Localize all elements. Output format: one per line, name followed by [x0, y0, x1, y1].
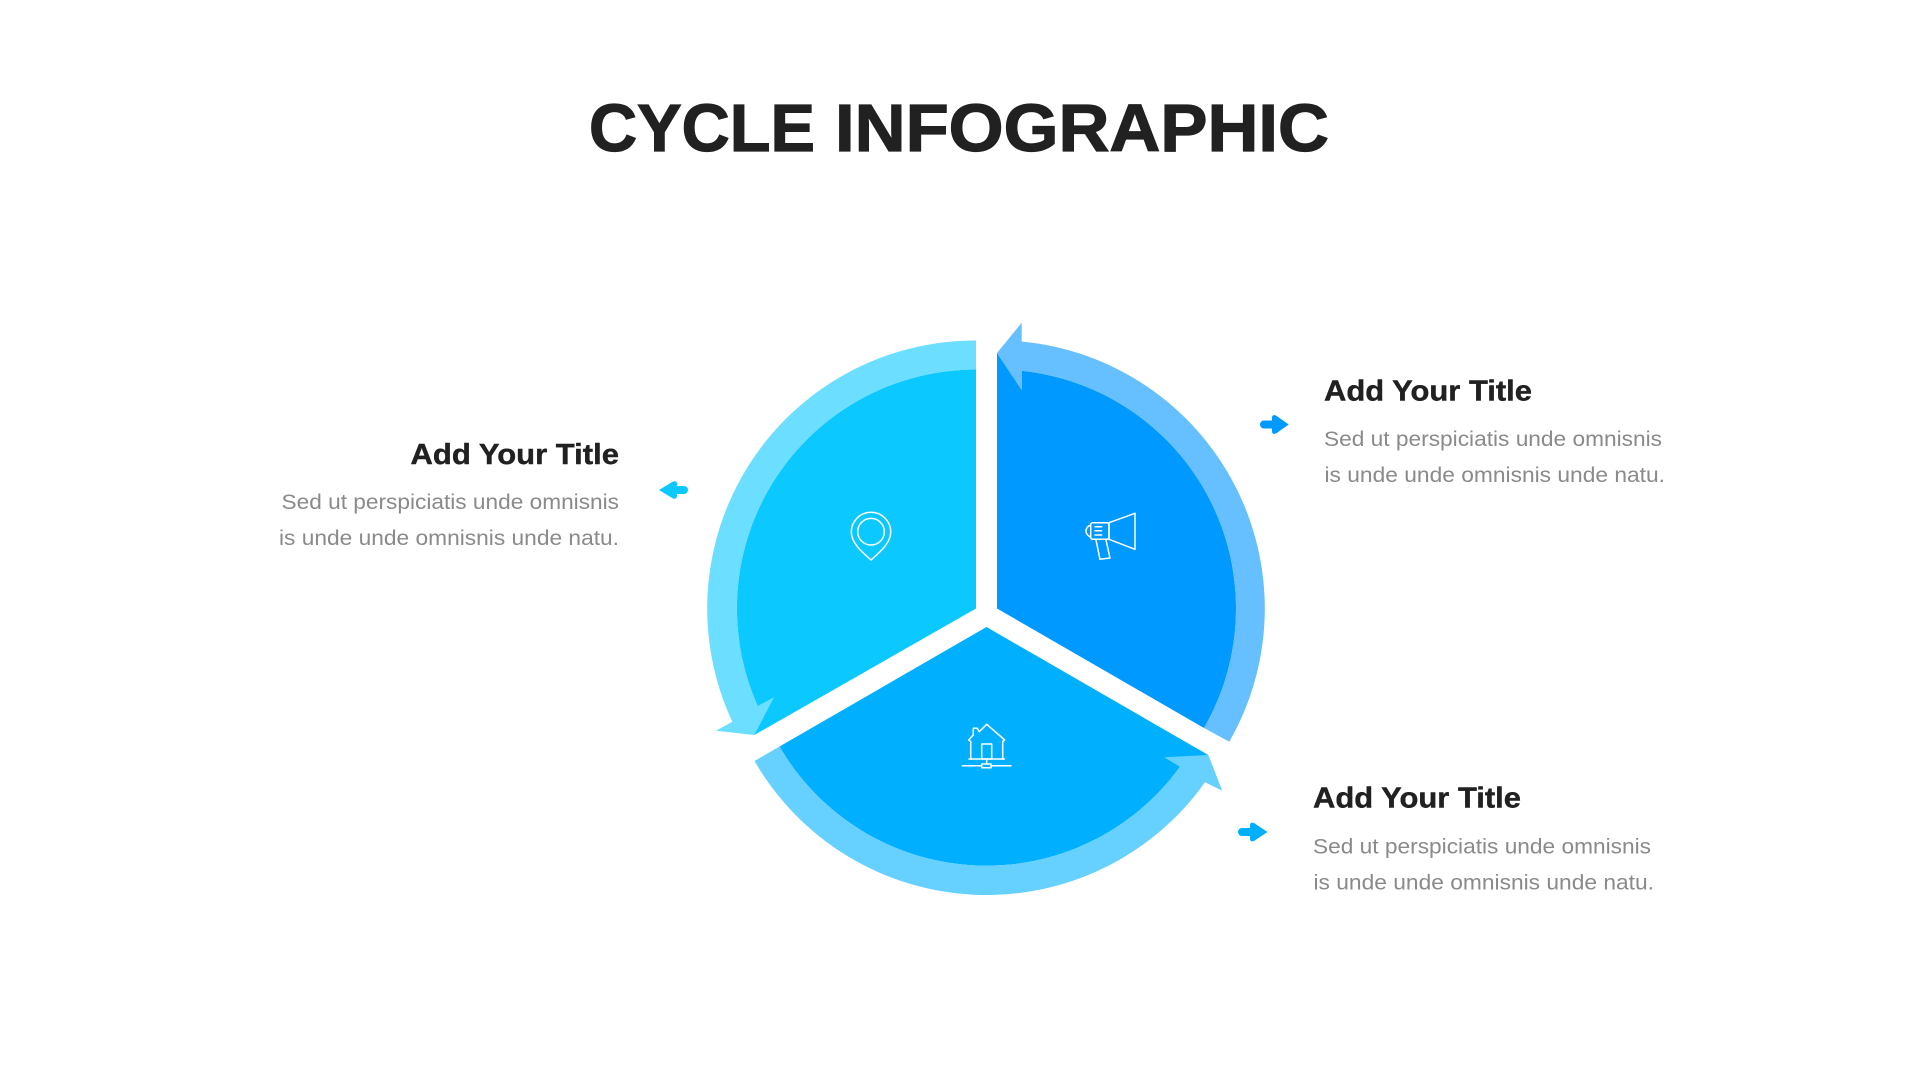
heading: Add Your Title	[410, 439, 619, 471]
left ring arrow	[707, 340, 976, 735]
right ring arrow	[997, 323, 1265, 742]
icon: map pin	[851, 512, 891, 560]
callout: top right	[1260, 376, 1665, 487]
icon: house network	[962, 724, 1011, 768]
body text: Sed ut perspiciatis unde omnisnis	[1313, 836, 1651, 858]
bottom slice	[780, 627, 1208, 866]
arrow: right pointer	[1260, 415, 1289, 434]
heading: Add Your Title	[1324, 376, 1532, 408]
segment: right	[997, 323, 1265, 742]
title	[589, 91, 1329, 166]
segment: bottom	[754, 627, 1222, 895]
body text	[1313, 836, 1654, 894]
bottom ring arrow	[754, 746, 1222, 895]
title: INFOGRAPHIC	[835, 91, 1329, 166]
callout: left	[279, 439, 688, 550]
body text: is unde unde omnisnis unde natu.	[279, 527, 619, 550]
body text: Sed ut perspiciatis unde omnisnis	[282, 491, 619, 514]
arrow: right pointer	[1238, 823, 1268, 841]
body text: Sed ut perspiciatis unde omnisnis	[1324, 428, 1662, 451]
body text	[279, 491, 619, 550]
title: CYCLE	[589, 91, 815, 166]
arrow: left pointer	[659, 481, 688, 499]
cycle diagram	[707, 323, 1265, 895]
left slice	[737, 369, 976, 735]
segment: left	[707, 340, 976, 735]
heading: Add Your Title	[1313, 782, 1521, 814]
body text	[1324, 428, 1665, 487]
body text: is unde unde omnisnis unde natu.	[1324, 464, 1665, 487]
icon: megaphone	[1086, 513, 1135, 559]
right slice	[997, 353, 1236, 728]
body text: is unde unde omnisnis unde natu.	[1314, 872, 1654, 894]
callout: bottom right	[1238, 782, 1654, 894]
